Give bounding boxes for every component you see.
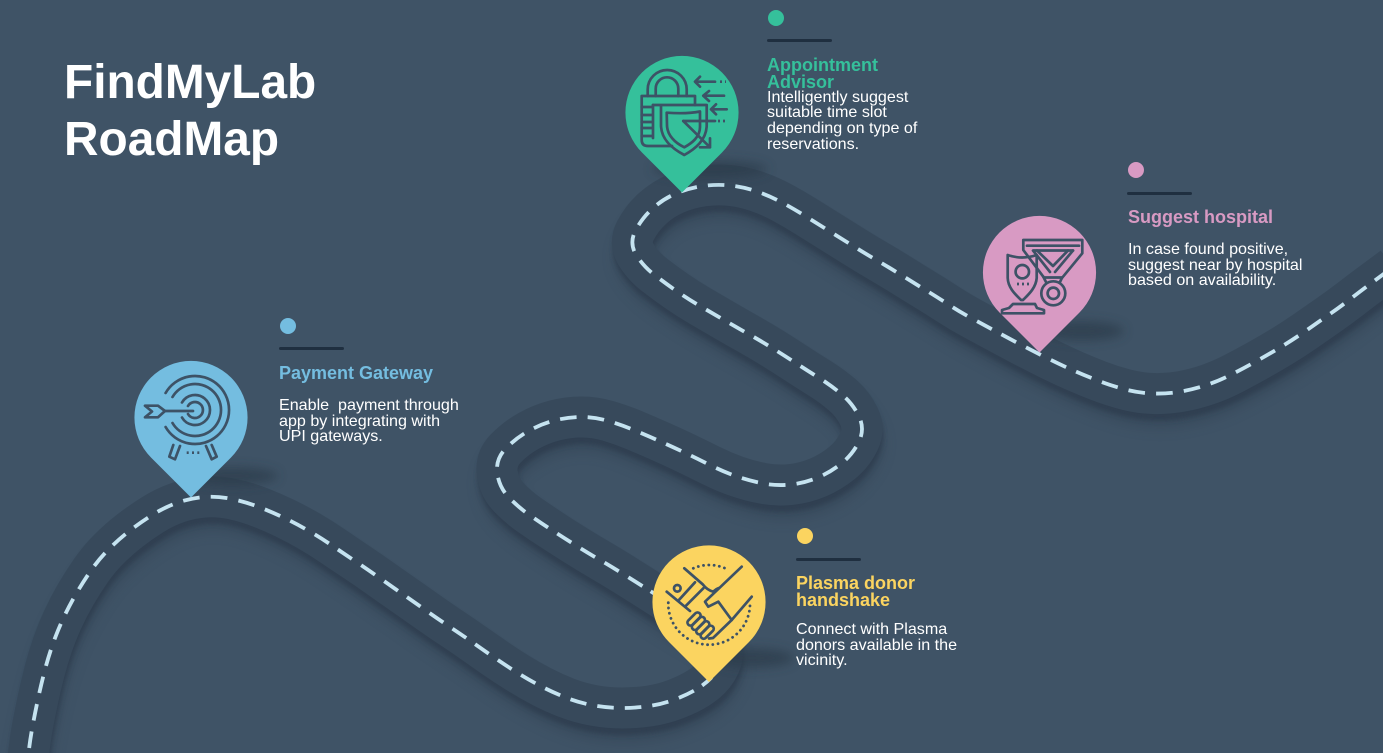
icon: trophy and medal xyxy=(1002,240,1082,313)
pin shadows xyxy=(186,160,1124,668)
description: In case found positive, xyxy=(1128,240,1288,258)
divider xyxy=(796,558,861,561)
marker dot xyxy=(280,318,296,334)
heading xyxy=(767,55,878,92)
description: app by integrating with xyxy=(279,412,440,430)
description xyxy=(279,396,459,445)
fist fingers xyxy=(686,611,715,640)
description: depending on type of xyxy=(767,119,917,137)
title xyxy=(64,56,316,166)
description: UPI gateways. xyxy=(279,427,383,445)
pin: plasma donor handshake xyxy=(652,545,766,682)
heading: Plasma donor xyxy=(796,573,915,593)
block: plasma donor handshake xyxy=(796,528,957,669)
heading: Appointment xyxy=(767,55,878,75)
road hard shadow xyxy=(28,192,1383,753)
road centre dashes xyxy=(28,185,1383,753)
title: RoadMap xyxy=(64,113,279,166)
heading: Payment Gateway xyxy=(279,363,433,383)
heading: Suggest hospital xyxy=(1128,207,1273,227)
marker dot xyxy=(797,528,813,544)
description xyxy=(1128,240,1302,289)
pin: appointment advisor xyxy=(625,56,739,193)
pin: payment gateway xyxy=(134,361,248,498)
block: appointment advisor xyxy=(767,10,918,153)
description xyxy=(767,88,918,153)
description: reservations. xyxy=(767,135,859,153)
description: Intelligently suggest xyxy=(767,88,908,106)
pin: suggest hospital xyxy=(983,216,1096,352)
icon: padlock and shield xyxy=(642,70,728,155)
description: suggest near by hospital xyxy=(1128,256,1302,274)
heading: Advisor xyxy=(767,72,834,92)
description: Enable payment through xyxy=(279,396,459,414)
heading xyxy=(796,573,915,610)
block: suggest hospital xyxy=(1127,162,1302,289)
marker dot xyxy=(768,10,784,26)
road soft shadow xyxy=(29,200,1383,753)
description xyxy=(796,620,957,669)
description: vicinity. xyxy=(796,651,848,669)
title: FindMyLab xyxy=(64,56,316,109)
marker dot xyxy=(1128,162,1144,178)
icon: handshake xyxy=(667,565,752,645)
description: donors available in the xyxy=(796,636,957,654)
divider xyxy=(279,347,344,350)
road surface xyxy=(27,185,1383,753)
description: Connect with Plasma xyxy=(796,620,947,638)
divider xyxy=(767,39,832,42)
description: based on availability. xyxy=(1128,271,1276,289)
icon: target with arrow xyxy=(145,376,229,459)
heading: handshake xyxy=(796,590,890,610)
description: suitable time slot xyxy=(767,103,887,121)
block: payment gateway xyxy=(279,318,459,445)
divider xyxy=(1127,192,1192,195)
